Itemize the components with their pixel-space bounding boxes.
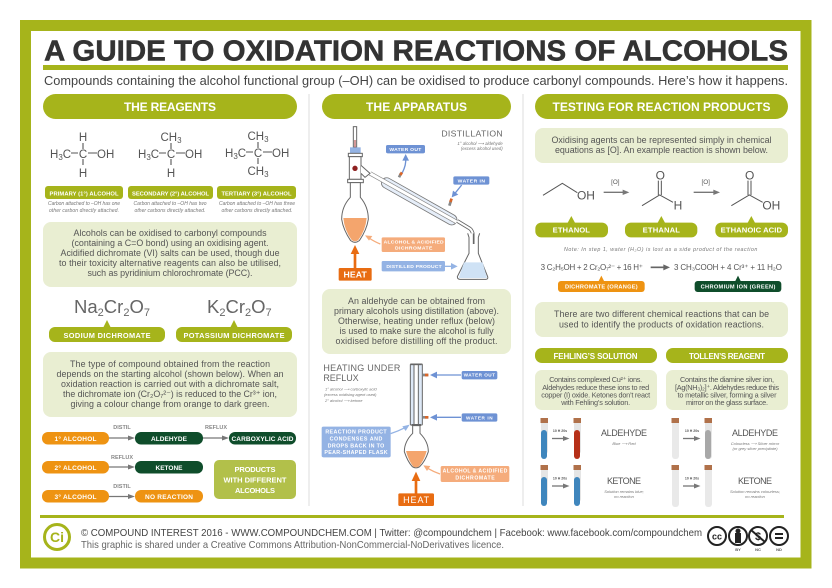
result: fehling's aldehyde	[601, 428, 647, 446]
label: potassium dichromate	[176, 320, 292, 342]
result: fehling's ketone: Solution remains blue;	[604, 489, 644, 494]
heading: fehling's solution: FEHLING’S SOLUTION	[554, 352, 638, 361]
text box: two reactions	[535, 302, 788, 337]
text box: fehling's: Aldehydes reduce these ions to red	[542, 383, 649, 392]
structure: secondary alcohol: C	[167, 149, 175, 161]
structure: tertiary alcohol: OH	[272, 148, 289, 160]
structure: secondary alcohol	[138, 132, 202, 180]
label: alcohol and acidified dichromate: ALCOHOL & ACIDIFIED	[384, 239, 444, 245]
structure: tertiary alcohol: 3	[233, 152, 238, 161]
caption: tertiary: Carbon attached to –OH has three	[219, 201, 295, 207]
text box: compound obtained: oxidation reaction is carried out with a dichromate salt,	[61, 379, 279, 389]
structure: primary alcohol: C	[79, 149, 87, 161]
result: tollen's aldehyde: (or grey silver precipitate)	[732, 446, 778, 451]
label: secondary alcohol: SECONDARY (2°) ALCOHOL	[132, 191, 209, 197]
flow chart: alcohol products: DISTIL	[113, 425, 131, 431]
text box: oxidising agents as [O]: Oxidising agents can be represented simply in chemical	[552, 135, 772, 145]
callout: products with different alcohols: WITH DIFFERENT	[224, 476, 287, 484]
result: tollen's aldehyde	[731, 428, 780, 451]
text box: tollen's: mirror on the glass surface.	[686, 398, 768, 407]
heading: tollen's reagent	[666, 348, 788, 363]
callout: products with different alcohols: ALCOHOLS	[235, 486, 275, 495]
intro text: Compounds containing the alcohol functional group (–OH) can be oxidised to produce carbonyl compounds. Here’s how it happens.	[44, 73, 788, 88]
result: tollen's ketone: no reaction	[745, 494, 766, 499]
footer	[40, 515, 788, 552]
text box: tollen's	[666, 370, 788, 410]
label: ethanol	[535, 216, 608, 237]
flow chart: alcohol products: CARBOXYLIC ACID	[232, 436, 294, 443]
callout: reaction product condenses: CONDENSES AND	[330, 437, 382, 443]
structure: tertiary alcohol: 3	[264, 170, 269, 179]
molecule: ethanol: OH	[577, 188, 595, 202]
result: tollen's ketone: Solution remains colourless;	[730, 489, 780, 494]
test tubes: tollen's ketone	[672, 465, 712, 507]
result: fehling's ketone: no reaction	[614, 494, 635, 499]
sub-panel: tollen's reagent	[666, 348, 788, 507]
text box: tollen's: Contains the diamine silver ion,	[680, 375, 774, 384]
formula: potassium dichromate: 2	[245, 307, 251, 319]
icon: creative commons badges: $	[755, 531, 761, 543]
text box: fehling's: copper (I) oxide. Ketones don’t react	[541, 390, 650, 400]
arrow and label: heat	[398, 472, 434, 506]
callout: products with different alcohols: PRODUCTS	[234, 465, 276, 474]
structure: tertiary alcohol: CH	[247, 131, 264, 143]
molecule: ethanoic acid: O	[745, 168, 754, 182]
text box: two reactions: used to identify the products of oxidation reactions.	[559, 320, 764, 330]
label: heating under reflux: REFLUX	[323, 373, 359, 383]
structure: primary alcohol: 3	[58, 153, 63, 162]
arrow: step 2	[694, 179, 720, 195]
text box: distillation and reflux: Otherwise, heating under reflux (below)	[338, 316, 495, 326]
title: A GUIDE TO OXIDATION REACTIONS OF ALCOHOLS	[44, 36, 788, 68]
text box: tollen's: to metallic silver, forming a silver	[678, 390, 777, 400]
result: fehling's aldehyde: ALDEHYDE	[601, 428, 647, 438]
heading: testing for reaction products	[535, 94, 788, 119]
formula: sodium dichromate: 2	[123, 307, 129, 319]
reflux glassware	[404, 364, 428, 468]
text box: distillation and reflux: is used to make sure the alcohol is fully	[340, 326, 494, 336]
structure: tertiary alcohol: C	[238, 148, 246, 160]
icon: Ci logo	[44, 524, 70, 550]
flow chart: alcohol products: 3° ALCOHOL	[54, 493, 97, 501]
text box: tollen's: [Ag(NH₃)₂]⁺. Aldehydes reduce this	[675, 383, 779, 392]
label: potassium dichromate: POTASSIUM DICHROMATE	[184, 331, 285, 340]
label: dichromate (orange): DICHROMATE (ORANGE)	[565, 285, 638, 291]
structure: primary alcohol: H	[79, 132, 87, 144]
heading: the reagents	[43, 94, 297, 119]
caption: primary	[48, 201, 120, 214]
arrow and label: heat: HEAT	[343, 269, 368, 279]
icon: creative commons badges	[708, 527, 788, 552]
text box: compound obtained: giving a colour change from orange to dark green.	[70, 399, 270, 409]
sub-panel: fehling's solution	[535, 348, 657, 506]
text box: oxidising agents as [O]	[535, 128, 788, 163]
result: tollen's aldehyde: ALDEHYDE	[732, 428, 778, 438]
formula: sodium dichromate: 7	[144, 307, 150, 319]
structure: primary alcohol: H	[79, 168, 87, 180]
arrow: step 1	[604, 179, 629, 195]
result: fehling's aldehyde: Blue ⟶ Red	[612, 441, 636, 446]
text box: distillation and reflux: oxidised before distilling off the product.	[336, 336, 498, 346]
caption: secondary: Carbon attached to –OH has two	[134, 201, 207, 207]
result: tollen's ketone	[730, 476, 780, 499]
text box: fehling's	[535, 370, 657, 410]
icon: creative commons badges: ND	[776, 547, 782, 552]
structure: primary alcohol: H	[50, 149, 58, 161]
label: tertiary alcohol: TERTIARY (3°) ALCOHOL	[222, 191, 292, 197]
label: tertiary alcohol	[217, 186, 296, 199]
formula: sodium dichromate: 2	[98, 307, 104, 319]
icon: creative commons badges: cc	[712, 532, 722, 542]
structure: tertiary alcohol: H	[225, 148, 233, 160]
structure: primary alcohol	[50, 132, 114, 180]
text box: fehling's: with Fehling’s solution.	[560, 398, 630, 407]
caption: secondary: other carbons directly attached.	[134, 208, 206, 214]
molecule: ethanal: O	[656, 168, 665, 182]
panel: the apparatus	[322, 94, 511, 506]
note: Note: In step 1, water (H₂O) is lost as a side product of the reaction	[564, 247, 757, 253]
heading: fehling's solution	[535, 348, 657, 363]
structure: secondary alcohol: OH	[185, 149, 202, 161]
formula: potassium dichromate: 2	[219, 307, 225, 319]
formula: sodium dichromate: Na	[74, 296, 98, 317]
heading: the reagents: THE REAGENTS	[124, 100, 216, 114]
label: alcohol and acidified dichromate: ALCOHOL & ACIDIFIED	[443, 469, 508, 475]
text box: oxidising agents: to their toxicity alternative reagents can also be utilised,	[59, 258, 281, 268]
structure: secondary alcohol: H	[138, 149, 146, 161]
text box: compound obtained: depends on the starting alcohol (shown below). When an	[56, 369, 284, 379]
test tubes: tollen's aldehyde: 10 H 20s	[685, 429, 699, 433]
flow chart: alcohol products: KETONE	[156, 465, 183, 472]
flow chart: alcohol products: ALDEHYDE	[151, 436, 188, 443]
reaction scheme	[535, 168, 788, 292]
text box: oxidising agents: Alcohols can be oxidised to carbonyl compounds	[74, 228, 267, 238]
flow chart: alcohol products	[42, 425, 296, 502]
diagram: distillation	[339, 127, 503, 281]
flow chart: alcohol products: REFLUX	[111, 455, 133, 461]
text box: oxidising agents: (containing a C=O bond) using an oxidising agent.	[72, 238, 268, 248]
text box: oxidising agents: Acidified dichromate (VI) salts can be used, though due	[60, 248, 280, 258]
structure: tertiary alcohol: 3	[264, 135, 269, 144]
test tubes: fehling's aldehyde	[540, 418, 581, 459]
callout: reaction product condenses: DROPS BACK IN TO	[328, 443, 384, 449]
label: primary alcohol: PRIMARY (1°) ALCOHOL	[50, 191, 119, 197]
caption: secondary	[134, 201, 207, 214]
arrow and label: heat: HEAT	[403, 495, 430, 505]
molecule: ethanoic acid: OH	[762, 198, 780, 212]
label: chromium ion (green)	[695, 276, 781, 292]
caption: primary: Carbon attached to –OH has one	[48, 201, 120, 207]
text box: compound obtained	[43, 352, 297, 417]
label: water in	[430, 413, 497, 422]
label: heating under reflux: 1° alcohol ⟶ carboxylic acid	[325, 387, 377, 392]
callout: reaction product condenses: REACTION PRODUCT	[325, 430, 387, 436]
label: alcohol and acidified dichromate: DICHROMATE	[455, 475, 495, 481]
test tubes: tollen's ketone: 10 H 20s	[685, 476, 699, 480]
label: sodium dichromate: SODIUM DICHROMATE	[64, 331, 151, 340]
structure: secondary alcohol: 3	[146, 153, 151, 162]
label: distillation: DISTILLATION	[441, 129, 503, 139]
label: water out	[430, 371, 497, 379]
label: alcohol and acidified dichromate	[423, 465, 509, 482]
heading: the apparatus: THE APPARATUS	[366, 100, 467, 114]
arrow and label: heat	[339, 245, 372, 281]
test tubes: fehling's ketone: 10 H 20s	[553, 476, 567, 480]
text box: oxidising agents	[43, 222, 297, 287]
label: primary alcohol	[45, 186, 123, 199]
label: water in: WATER IN	[466, 415, 493, 420]
caption: tertiary	[219, 201, 295, 214]
flow chart: alcohol products: NO REACTION	[145, 494, 193, 501]
structure: secondary alcohol: C	[151, 149, 159, 161]
label: ethanoic acid: ETHANOIC ACID	[721, 226, 782, 235]
diagram: heating under reflux	[322, 363, 509, 506]
text box: distillation and reflux: An aldehyde can be obtained from	[348, 296, 485, 306]
formula: potassium dichromate: Cr	[225, 296, 245, 317]
label: ethanal: ETHANAL	[643, 226, 680, 235]
formula: sodium dichromate: Cr	[104, 296, 123, 317]
formula: potassium dichromate: K	[207, 296, 219, 317]
result: tollen's aldehyde: Colourless ⟶ Silver mirror	[731, 441, 780, 446]
label: heating under reflux	[323, 363, 401, 403]
chemical equation: 3 CH₃COOH + 4 Cr³⁺ + 11 H₂O	[674, 263, 782, 272]
structure: primary alcohol: OH	[97, 149, 114, 161]
panel: the reagents	[42, 94, 297, 502]
test tubes: tollen's aldehyde	[672, 418, 712, 459]
footer text	[81, 527, 702, 551]
label: water in: WATER IN	[458, 178, 485, 184]
text box: oxidising agents as [O]: equations as [O]. An example reaction is shown below.	[555, 145, 768, 155]
label: ethanol: ETHANOL	[553, 226, 590, 235]
footer text: © COMPOUND INTEREST 2016 - WWW.COMPOUNDCHEM.COM | Twitter: @compoundchem | Facebook: www.facebook.com/compoundchem	[81, 527, 702, 539]
text box: compound obtained: the dichromate ion (Cr₂O₇²⁻) is reduced to the Cr³⁺ ion,	[63, 389, 277, 399]
icon: creative commons badges: BY	[735, 547, 741, 552]
test tubes: fehling's ketone	[540, 465, 581, 506]
label: water in	[452, 176, 489, 197]
arrow: step 2: [O]	[701, 179, 710, 186]
molecule: ethanal	[642, 168, 682, 212]
result: tollen's ketone: KETONE	[738, 476, 772, 486]
label: distilled product: DISTILLED PRODUCT	[386, 264, 442, 270]
label: heating under reflux: (excess oxidising agent used)	[324, 392, 377, 397]
callout: products with different alcohols	[214, 460, 296, 499]
molecule: ethanoic acid	[731, 168, 780, 212]
label: dichromate (orange)	[558, 276, 645, 292]
callout: reaction product condenses	[322, 425, 410, 457]
label: distillation	[441, 129, 503, 151]
result: fehling's ketone: KETONE	[607, 476, 641, 486]
text box: oxidising agents: such as pyridinium chlorochromate (PCC).	[88, 268, 252, 278]
heading: the apparatus	[322, 94, 511, 119]
label: alcohol and acidified dichromate	[365, 235, 445, 252]
molecule: ethanol	[543, 183, 595, 202]
label: secondary alcohol	[128, 186, 213, 199]
label: water out	[386, 145, 425, 173]
structure: primary alcohol: C	[63, 149, 71, 161]
formula: potassium dichromate: 7	[266, 307, 272, 319]
icon: Ci logo: Ci	[50, 529, 64, 545]
formula: sodium dichromate: O	[129, 296, 144, 317]
chemical equation	[541, 263, 782, 272]
label: sodium dichromate	[49, 320, 165, 342]
text box: two reactions: There are two different chemical reactions that can be	[554, 309, 769, 319]
caption: primary: other carbon directly attached.	[49, 208, 119, 214]
heading: tollen's reagent: TOLLEN’S REAGENT	[689, 352, 765, 361]
flow chart: alcohol products: 1° ALCOHOL	[54, 435, 97, 443]
structure: secondary alcohol: H	[167, 168, 175, 180]
label: alcohol and acidified dichromate: DICHROMATE	[395, 246, 433, 252]
panel: testing for reaction products	[535, 94, 788, 507]
molecule: ethanal: H	[674, 198, 682, 212]
label: ethanal	[625, 216, 697, 237]
label: chromium ion (green): CHROMIUM ION (GREEN)	[701, 285, 775, 291]
text box: distillation and reflux: primary alcohols using distillation (above).	[334, 306, 499, 316]
structure: secondary alcohol: CH	[160, 132, 177, 144]
structure: tertiary alcohol: C	[254, 148, 262, 160]
footer text: This graphic is shared under a Creative Commons Attribution-NonCommercial-NoDerivatives licence.	[81, 539, 504, 551]
text box: fehling's: Contains complexed Cu²⁺ ions.	[549, 375, 642, 384]
label: ethanoic acid	[715, 216, 788, 237]
structure: tertiary alcohol	[225, 131, 289, 179]
flow chart: alcohol products: REFLUX	[205, 425, 227, 431]
label: distilled product	[382, 261, 458, 271]
label: distillation: (excess alcohol used)	[461, 146, 503, 151]
label: distillation: 1° alcohol ⟶ aldehyde	[457, 141, 503, 146]
flow chart: alcohol products: DISTIL	[113, 484, 131, 490]
callout: reaction product condenses: PEAR-SHAPED FLASK	[324, 450, 388, 456]
arrow: step 1: [O]	[611, 179, 620, 186]
structure: secondary alcohol: 3	[177, 136, 182, 145]
label: heating under reflux: HEATING UNDER	[323, 363, 401, 373]
icon: creative commons badges: NC	[755, 547, 761, 552]
structure: tertiary alcohol: CH	[247, 166, 264, 178]
flow chart: alcohol products: 2° ALCOHOL	[54, 464, 97, 472]
text box: compound obtained: The type of compound obtained from the reaction	[70, 359, 270, 369]
test tubes: fehling's aldehyde: 10 H 20s	[553, 429, 567, 433]
formula: potassium dichromate: O	[251, 296, 266, 317]
label: heating under reflux: 2° alcohol ⟶ ketone	[324, 398, 363, 403]
result: fehling's ketone	[604, 476, 644, 499]
label: water out: WATER OUT	[389, 147, 421, 153]
label: water out: WATER OUT	[464, 373, 495, 378]
chemical equation: 3 C₂H₅OH + 2 Cr₂O₇²⁻ + 16 H⁺	[541, 263, 643, 272]
caption: tertiary: other carbons directly attached.	[222, 208, 292, 214]
heading: testing for reaction products: TESTING FOR REACTION PRODUCTS	[552, 100, 770, 114]
text box: distillation and reflux	[322, 289, 511, 354]
